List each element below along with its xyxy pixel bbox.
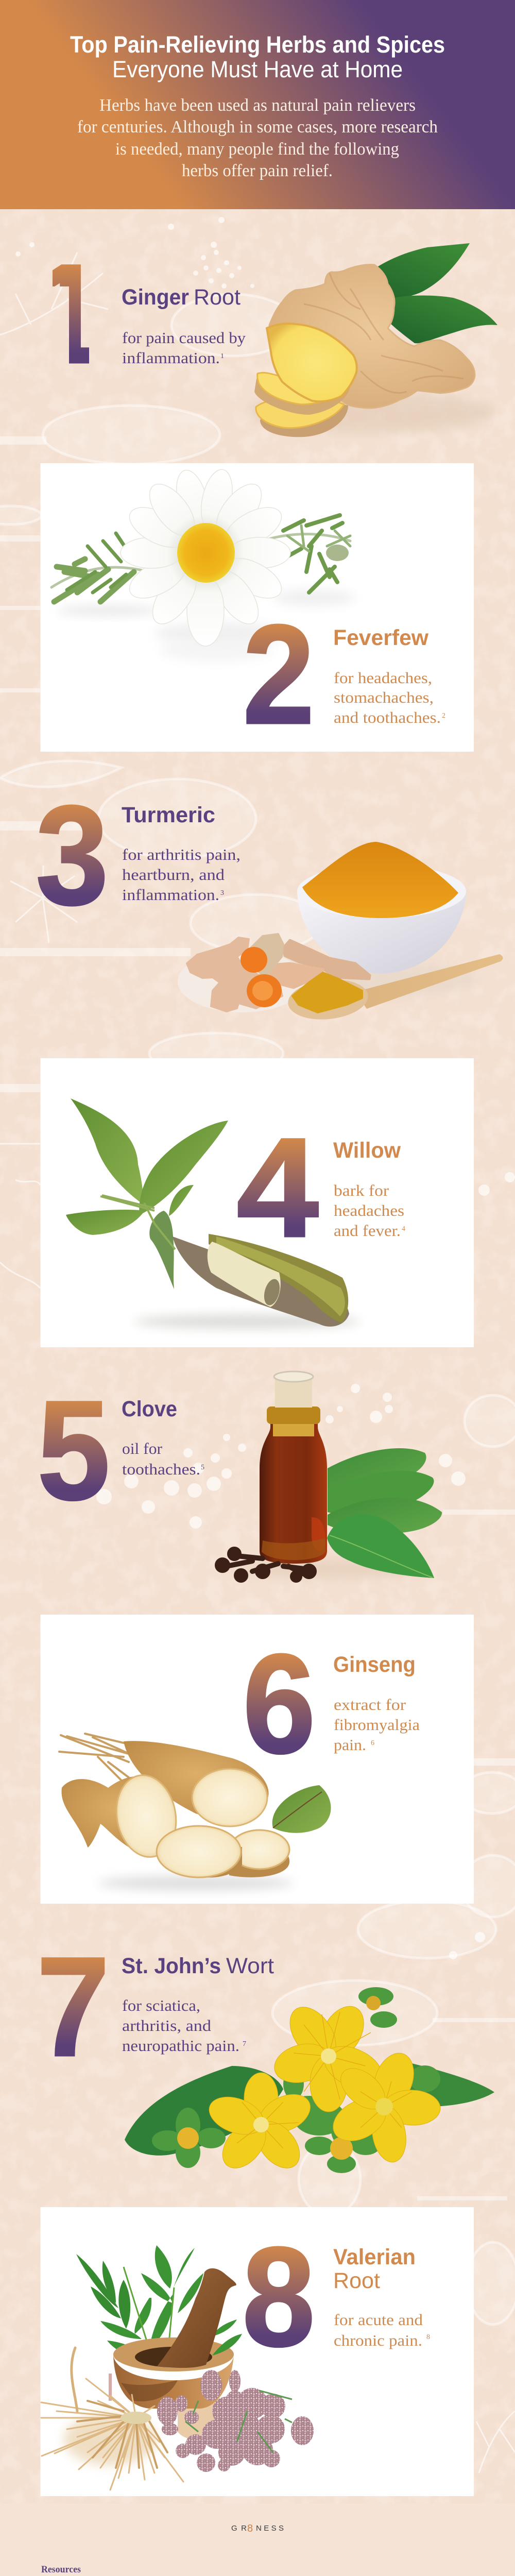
description: willow: 4 (402, 1225, 405, 1233)
title: Everyone Must Have at Home (112, 56, 403, 82)
description: ginger (122, 329, 246, 367)
heading: ginger root (122, 285, 241, 310)
description: willow: headaches (334, 1201, 404, 1219)
heading: willow: Willow (333, 1138, 401, 1163)
illustration: ginseng roots and leaf (59, 1734, 331, 1890)
intro text: herbs offer pain relief. (182, 161, 333, 180)
number 8: 8 (242, 2218, 315, 2376)
heading: st john's wort (122, 1954, 274, 1978)
description: willow: bark for (334, 1181, 389, 1199)
illustration: st john's wort flowers (125, 1987, 494, 2176)
description: ginseng: fibromyalgia (334, 1716, 420, 1734)
description: feverfew: for headaches, (334, 669, 432, 687)
resources heading: Resources (41, 2564, 81, 2575)
description: clove: 5 (201, 1464, 204, 1471)
panel: willow card (40, 1058, 474, 1347)
description: valerian: 8 (426, 2333, 430, 2341)
description: st john's wort: neuropathic pain. (122, 2037, 239, 2055)
illustration: willow leaves and bark (66, 1098, 360, 1329)
intro text: for centuries. Although in some cases, more research (77, 117, 438, 137)
description: turmeric: heartburn, and (122, 866, 225, 884)
description: feverfew: stomachaches, (334, 688, 434, 706)
description: ginger: for pain caused by (122, 329, 246, 347)
description: ginger: 1 (220, 352, 224, 360)
heading: valerian root: Root (333, 2268, 380, 2293)
illustration: clove oil bottle, leaves and cloves (217, 1371, 442, 1580)
description: feverfew: 2 (442, 712, 445, 720)
number 4: 4 (236, 1109, 320, 1267)
description: willow: and fever. (334, 1222, 401, 1240)
heading: clove: Clove (122, 1397, 177, 1421)
description: ginger: inflammation. (122, 349, 220, 367)
description: st john's wort: for sciatica, (122, 1996, 200, 2014)
panel: feverfew card (40, 463, 474, 754)
description: clove (122, 1439, 204, 1478)
logo: groness: NESS (256, 2524, 284, 2533)
number 2: 2 (243, 596, 315, 754)
description: valerian (334, 2311, 430, 2349)
heading: ginger root: Ginger (122, 285, 189, 310)
description: clove: toothaches. (122, 1460, 200, 1478)
panel: valerian card (40, 2207, 474, 2496)
description: feverfew: and toothaches. (334, 708, 441, 726)
logo: groness: GR (231, 2524, 247, 2533)
title: Top Pain-Relieving Herbs and Spices (70, 31, 445, 58)
description: turmeric: inflammation. (122, 886, 219, 904)
header band (0, 0, 515, 209)
heading: turmeric: Turmeric (122, 803, 215, 827)
description: st john's wort: arthritis, and (122, 2016, 212, 2035)
description: feverfew (334, 669, 445, 726)
description: st john's wort (122, 1996, 246, 2055)
logo: groness (231, 2523, 284, 2534)
description: st john's wort: 7 (243, 2040, 246, 2048)
heading: feverfew: Feverfew (333, 625, 429, 650)
illustration: ginger root and leaves (247, 243, 497, 437)
panel: ginseng card (40, 1615, 474, 1904)
description: turmeric: 3 (220, 889, 224, 897)
intro text: Herbs have been used as natural pain relievers (99, 96, 416, 115)
number 5: 5 (37, 1371, 110, 1530)
description: turmeric: for arthritis pain, (122, 845, 241, 863)
number 6: 6 (243, 1625, 316, 1783)
description: ginseng (334, 1696, 420, 1754)
logo: groness: 8 (247, 2523, 253, 2534)
heading: valerian root (333, 2245, 416, 2293)
intro text: is needed, many people find the following (115, 140, 399, 159)
heading: ginger root: Root (194, 285, 241, 310)
panel: ginger root (28, 235, 497, 437)
intro text (77, 96, 438, 180)
description: ginseng: extract for (334, 1696, 406, 1714)
description: valerian: chronic pain. (334, 2331, 422, 2349)
heading: st john's wort: St. John’s (122, 1954, 221, 1978)
illustration: turmeric bowl, roots and spoon (178, 842, 503, 1023)
heading: ginseng: Ginseng (333, 1652, 416, 1677)
heading: valerian root: Valerian (333, 2245, 416, 2269)
illustration: feverfew daisy (52, 467, 355, 662)
description: ginseng: 6 (371, 1739, 374, 1747)
number 3: 3 (36, 776, 109, 935)
description: ginseng: pain. (334, 1736, 366, 1754)
number 7: 7 (37, 1928, 110, 2086)
description: clove: oil for (122, 1439, 163, 1458)
illustration: mortar, pestle, leaves, valerian root and flowers (41, 2245, 314, 2490)
heading: st john's wort: Wort (226, 1954, 274, 1978)
panel: st john's wort (37, 1928, 494, 2176)
panel: clove (37, 1371, 442, 1580)
number 1: 1 (28, 235, 106, 393)
description: valerian: for acute and (334, 2311, 423, 2329)
description: turmeric (122, 845, 241, 904)
panel: turmeric (36, 776, 503, 1023)
title (70, 31, 445, 82)
description: willow (334, 1181, 405, 1240)
